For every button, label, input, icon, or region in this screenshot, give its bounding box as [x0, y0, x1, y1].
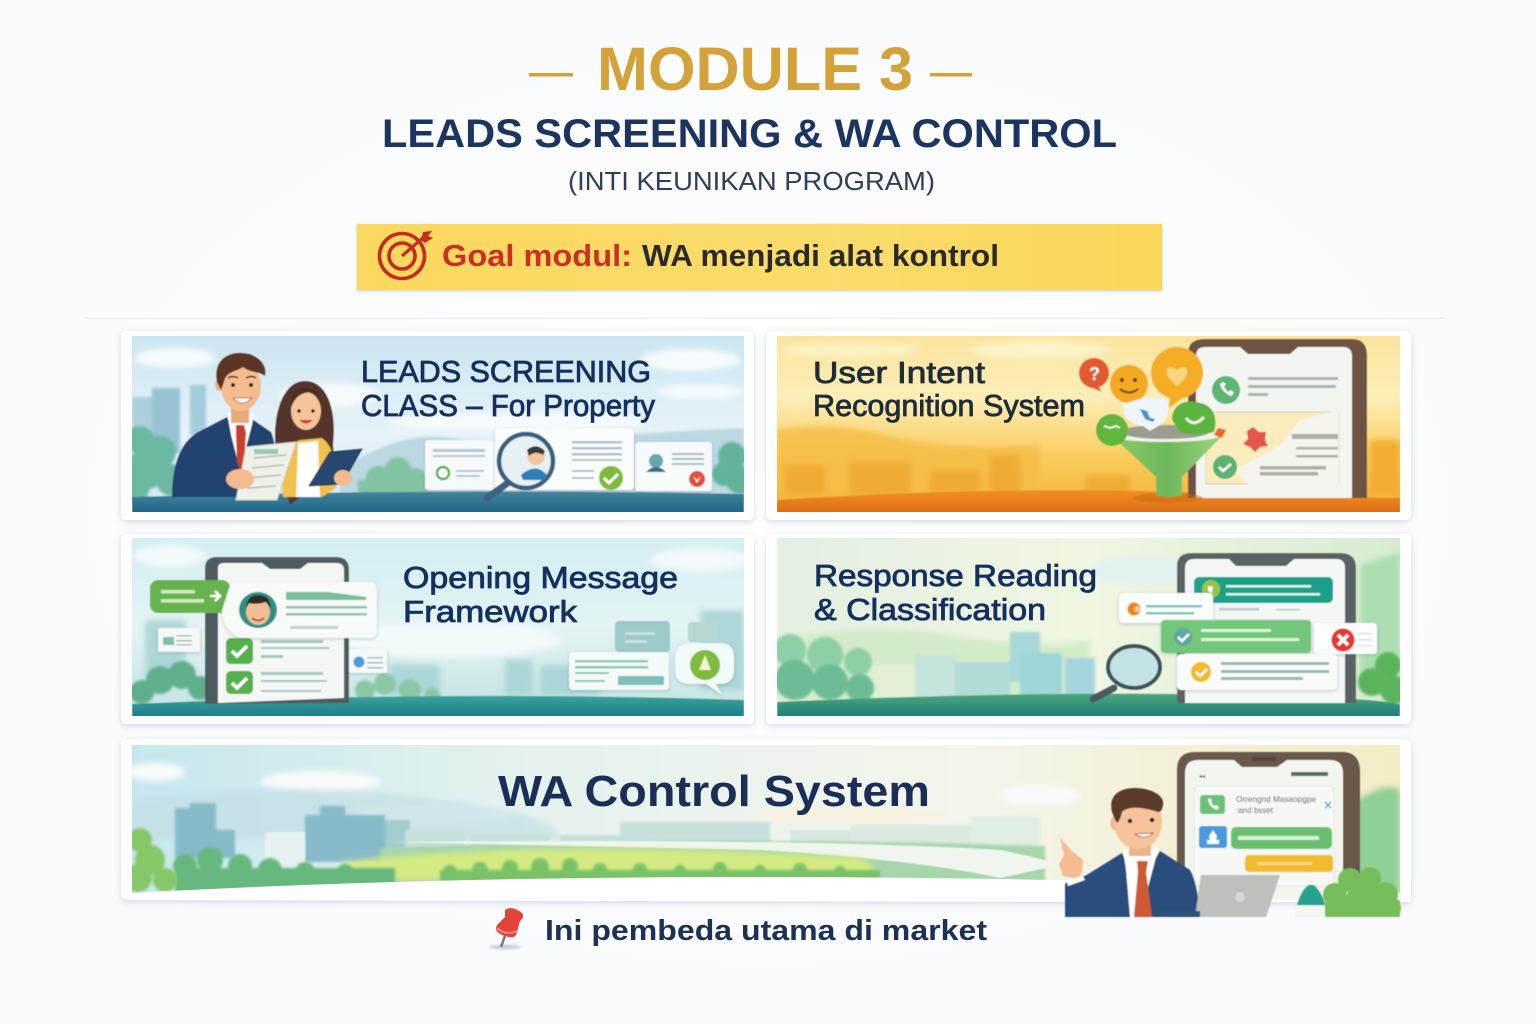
- illustration: classification cards: [1119, 577, 1377, 690]
- panel: opening message framework: [121, 534, 754, 724]
- illustration: phone with checklist: [205, 557, 349, 704]
- illustration: phone with WA screen: ◂◂: [1199, 774, 1205, 780]
- title: module number: MODULE 3: [597, 35, 913, 103]
- subtitle: (INTI KEUNIKAN PROGRAM): [568, 166, 935, 196]
- icon: push pin: [489, 908, 523, 950]
- panel heading: [361, 354, 655, 423]
- panel: user intent recognition system: [766, 331, 1411, 520]
- illustration: phone with WA screen: [1177, 752, 1360, 900]
- illustration: funnel with message bubbles: ?: [1089, 364, 1100, 384]
- goal label: Goal modul:: [442, 238, 632, 273]
- phone screen text: Orrengnd Masaopgpe: [1236, 794, 1316, 804]
- panel heading: Response Reading: [814, 558, 1097, 593]
- goal banner: [357, 224, 1162, 290]
- goal text: WA menjadi alat kontrol: [642, 238, 999, 273]
- footer note: Ini pembeda utama di market: [545, 915, 987, 947]
- heading: leads screening and WA control: LEADS SCREENING & WA CONTROL: [382, 112, 1117, 156]
- icon: magnifying glass: [1093, 646, 1160, 699]
- panel heading: & Classification: [814, 592, 1046, 627]
- illustration: reply card: [569, 652, 669, 690]
- panel heading: Framework: [403, 594, 578, 629]
- phone screen text: :and bsset: [1236, 806, 1274, 815]
- panel heading: WA Control System: [498, 767, 930, 816]
- panel heading: CLASS – For Property: [361, 388, 655, 423]
- panel: WA control system: [121, 739, 1411, 917]
- illustration: funnel with message bubbles: [1079, 347, 1226, 503]
- illustration: lead profile cards: [425, 428, 712, 491]
- illustration: small cards: [158, 628, 387, 673]
- illustration: man with document: [172, 353, 296, 500]
- illustration: potted bush: [1295, 867, 1401, 917]
- icon: magnifying glass: [487, 434, 553, 498]
- panel heading: LEADS SCREENING: [361, 354, 651, 389]
- illustration: green message bubble: [150, 580, 230, 613]
- illustration: woman with tablet: [275, 381, 362, 505]
- panel: response reading and classification: [766, 534, 1411, 724]
- illustration: phone with chat screen: [1188, 339, 1367, 498]
- panel heading: [814, 558, 1097, 627]
- illustration: phone: [1177, 553, 1356, 703]
- panel heading: [403, 560, 678, 629]
- phone screen text: [1236, 794, 1316, 815]
- panel heading: User Intent: [813, 355, 985, 390]
- illustration: faded chat cards: [615, 621, 718, 652]
- panel heading: [813, 355, 1085, 423]
- panel: leads screening class: [121, 331, 754, 520]
- icon: target with arrow: [380, 231, 433, 278]
- illustration: man pointing with laptop: [1059, 788, 1280, 917]
- illustration: profile message card: [222, 582, 377, 638]
- panel heading: Recognition System: [813, 388, 1085, 423]
- icon: speech bubble with green badge: [675, 643, 734, 695]
- panel heading: Opening Message: [403, 560, 678, 595]
